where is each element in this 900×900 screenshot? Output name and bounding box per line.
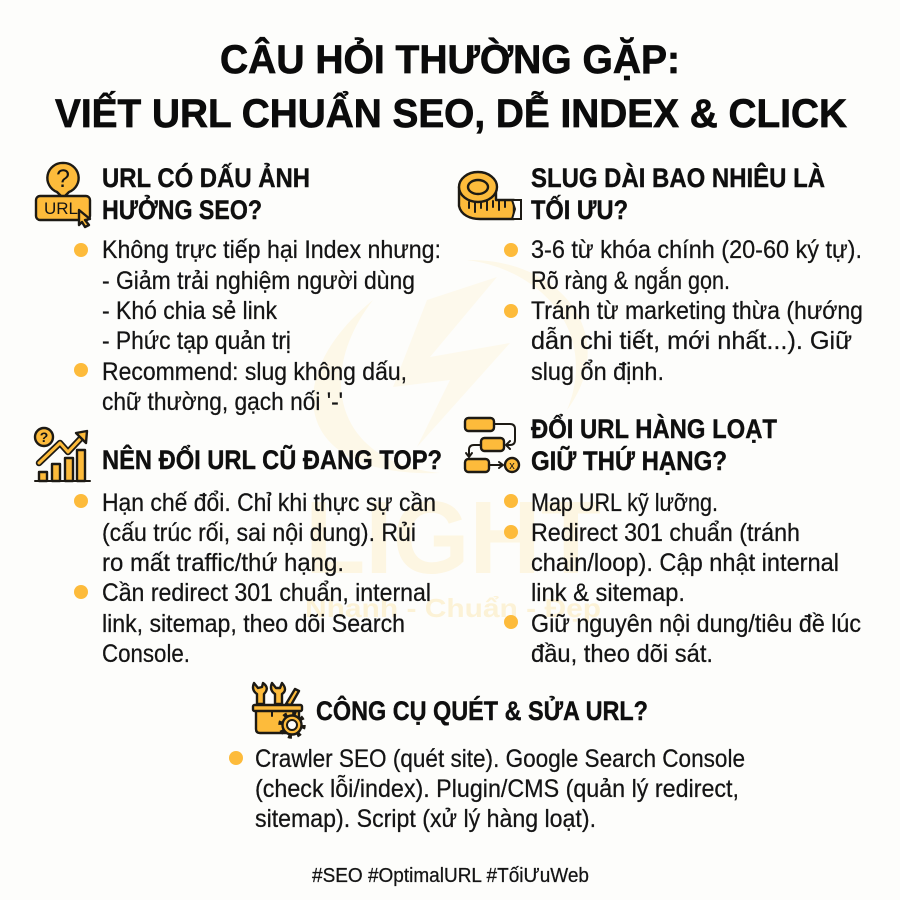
bullet list: Cần redirect 301 chuẩn, internal bbox=[102, 579, 431, 607]
heading: CÔNG CỤ QUÉT & SỬA URL? bbox=[316, 694, 648, 726]
heading: NÊN ĐỔI URL CŨ ĐANG TOP? bbox=[102, 444, 442, 475]
bullet list: Giữ nguyên nội dung/tiêu đề lúc bbox=[531, 610, 861, 638]
panel: Nên đổi URL cũ bbox=[35, 428, 442, 668]
bullet list: Map URL kỹ lưỡng. bbox=[531, 489, 718, 517]
bullet list: Rõ ràng & ngắn gọn. bbox=[531, 266, 730, 295]
heading: GIỮ THỨ HẠNG? bbox=[531, 445, 727, 476]
bullet list: dẫn chi tiết, mới nhất...). Giữ bbox=[531, 326, 852, 355]
bullet list bbox=[504, 489, 861, 668]
bullet list: Hạn chế đổi. Chỉ khi thực sự cần bbox=[102, 489, 436, 517]
heading: SLUG DÀI BAO NHIÊU LÀ bbox=[531, 162, 825, 193]
title: CÂU HỎI THƯỜNG GẶP: bbox=[220, 36, 680, 82]
heading bbox=[531, 413, 777, 476]
bullet list: link, sitemap, theo dõi Search bbox=[102, 610, 405, 638]
bullet list: Tránh từ marketing thừa (hướng bbox=[531, 297, 863, 325]
icon: URL question: ? bbox=[56, 165, 70, 193]
bullet list: (check lỗi/index). Plugin/CMS (quản lý redirect, bbox=[255, 774, 739, 803]
bullet list: Console. bbox=[102, 640, 190, 668]
icon: toolbox bbox=[253, 683, 304, 737]
panel: Đổi URL hàng loạt bbox=[465, 413, 861, 668]
panel: URL có dấu bbox=[36, 161, 441, 416]
icon: redirect flow: x bbox=[509, 460, 515, 472]
watermark logo: Nhanh - Chuẩn - Đẹp bbox=[305, 593, 601, 623]
icon: growth chart bbox=[35, 428, 90, 481]
heading: TỐI ƯU? bbox=[531, 193, 628, 225]
title bbox=[55, 36, 847, 136]
watermark logo: LIGHT bbox=[305, 480, 601, 595]
heading: URL CÓ DẤU ẢNH bbox=[102, 161, 310, 193]
watermark logo bbox=[305, 260, 601, 623]
bullet list bbox=[74, 489, 436, 668]
bullet list: 3-6 từ khóa chính (20-60 ký tự). bbox=[531, 236, 862, 264]
bullet list: sitemap). Script (xử lý hàng loạt). bbox=[255, 805, 596, 833]
bullet list: slug ổn định. bbox=[531, 358, 664, 386]
bullet list bbox=[229, 745, 745, 833]
icon: URL question: URL bbox=[44, 199, 78, 218]
bullet list: link & sitemap. bbox=[531, 579, 685, 607]
icon: measuring tape bbox=[459, 172, 521, 219]
icon: URL question bbox=[36, 163, 90, 227]
bullet list: chain/loop). Cập nhật internal bbox=[531, 549, 839, 577]
bullet list: Recommend: slug không dấu, bbox=[102, 358, 407, 386]
bullet list bbox=[74, 236, 441, 416]
title: VIẾT URL CHUẨN SEO, DỄ INDEX & CLICK bbox=[55, 89, 847, 136]
bullet list: Không trực tiếp hại Index nhưng: bbox=[102, 236, 441, 264]
heading bbox=[102, 161, 310, 225]
bullet list: Crawler SEO (quét site). Google Search Console bbox=[255, 745, 745, 773]
heading: ĐỔI URL HÀNG LOẠT bbox=[531, 413, 777, 444]
bullet list: - Khó chia sẻ link bbox=[102, 297, 277, 325]
hashtags footer: #SEO #OptimalURL #TốiƯuWeb bbox=[312, 865, 589, 887]
bullet list: ro mất traffic/thứ hạng. bbox=[102, 549, 344, 577]
bullet list: (cấu trúc rối, sai nội dung). Rủi bbox=[102, 519, 416, 547]
icon: growth chart: ? bbox=[40, 429, 48, 445]
bullet list bbox=[504, 236, 863, 386]
panel: Công cụ bbox=[229, 683, 745, 833]
bullet list: Redirect 301 chuẩn (tránh bbox=[531, 519, 800, 547]
bullet list: chữ thường, gạch nối '-' bbox=[102, 388, 343, 416]
heading: HƯỞNG SEO? bbox=[102, 193, 262, 225]
bullet list: - Phức tạp quản trị bbox=[102, 327, 291, 355]
panel: Slug dài bbox=[459, 162, 863, 386]
bullet list: - Giảm trải nghiệm người dùng bbox=[102, 267, 415, 295]
icon: redirect flow bbox=[465, 418, 519, 472]
heading bbox=[531, 162, 825, 225]
bullet list: đầu, theo dõi sát. bbox=[531, 640, 713, 668]
